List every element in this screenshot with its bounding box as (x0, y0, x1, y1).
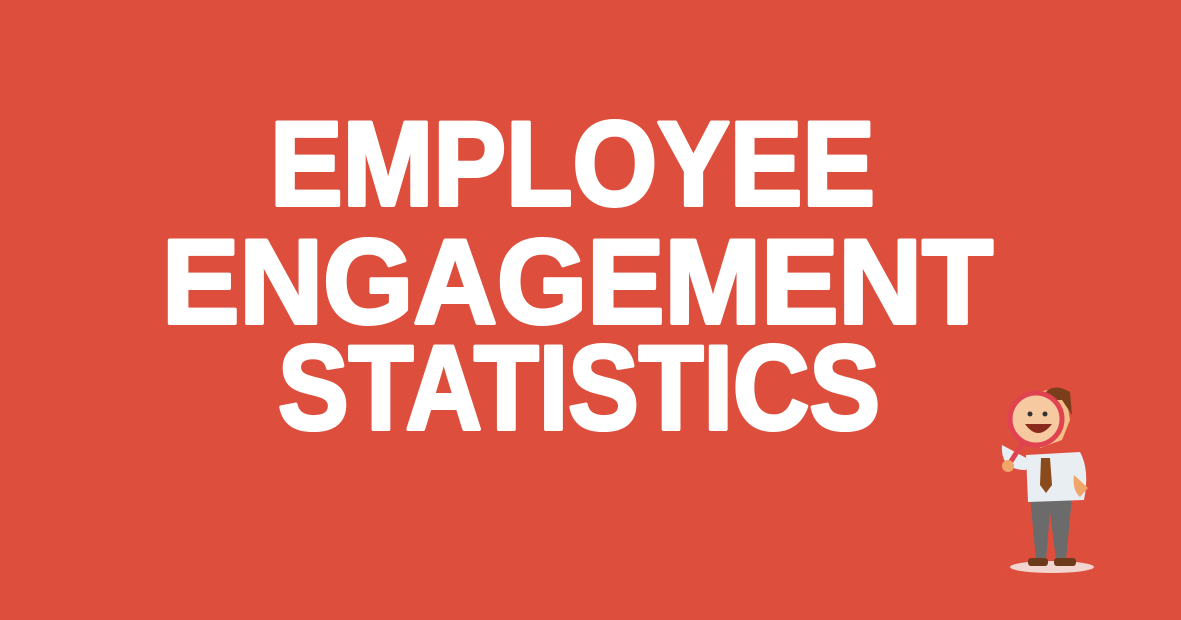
title (162, 97, 993, 455)
title: ENGAGEMENT (162, 215, 993, 349)
title: EMPLOYEE (270, 97, 875, 231)
icon: businessman with magnifier (1002, 388, 1094, 573)
title: STATISTICS (278, 321, 880, 455)
